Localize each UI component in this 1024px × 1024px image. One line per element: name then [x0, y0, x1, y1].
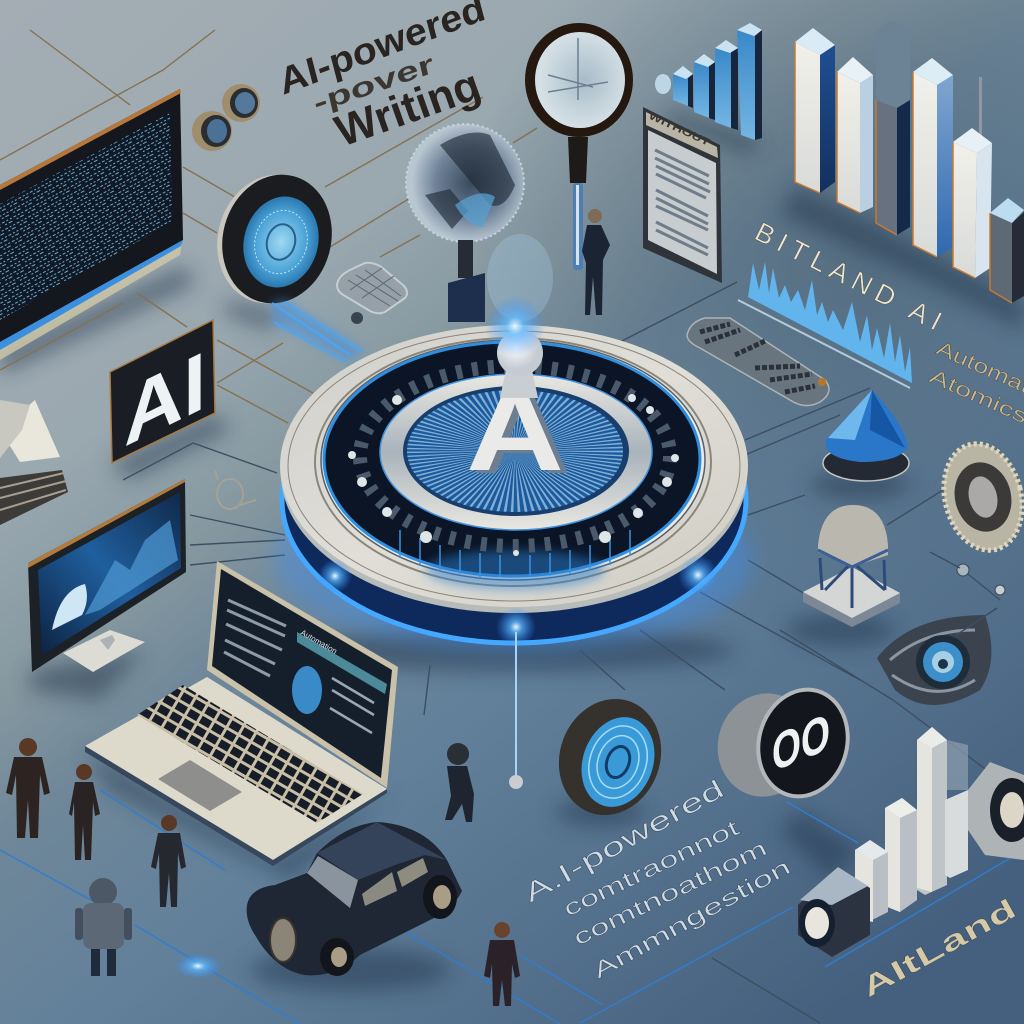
icon: magnifying glass: [525, 23, 633, 270]
platform outer glow: [274, 470, 754, 650]
person 1: [6, 738, 50, 838]
laptop: Automation: [299, 628, 339, 656]
platform base: [282, 357, 746, 643]
person 2: [69, 764, 100, 860]
icon: circuit board: [687, 318, 829, 406]
silver lip: [281, 335, 747, 613]
icon: large blue lens: [203, 162, 346, 316]
heading: Bitland AI: [750, 217, 1024, 428]
icon: blue spiral disc: [543, 684, 677, 830]
person: bottom figure: [484, 922, 520, 1006]
monitor: top left code display: [0, 89, 183, 360]
icon: glass globe: [406, 124, 553, 322]
person: kneeling figure: [445, 743, 474, 822]
laptop: [85, 561, 398, 866]
icon: speaker boxes: [798, 762, 1024, 957]
person: standing figure by magnifier: [582, 209, 610, 315]
people: group bottom left: [6, 738, 186, 907]
vintage car: [247, 822, 462, 976]
heading: AI-powered communication: [518, 773, 795, 983]
document page: WITHOUT: [647, 111, 711, 149]
bar chart: bottom right: [855, 727, 968, 922]
title: AI-powered writing: -pover: [310, 47, 437, 119]
laptop screen: [207, 561, 398, 788]
heading: Bitland AI: Automat: [933, 337, 1024, 398]
small connector bead: [930, 552, 1005, 636]
glow spot: floor: [174, 953, 222, 979]
heading: Aitland: AItLand: [856, 893, 1021, 1003]
icon: cylinder badge OO: [706, 677, 862, 809]
heading: Bitland AI: Atomics: [926, 365, 1024, 428]
icon: small eyeglass sketch: [215, 470, 256, 509]
icon: blue gem: [823, 390, 909, 481]
laptop base: [85, 677, 387, 860]
icon: envelope: [0, 400, 68, 525]
monitor: chart display: [28, 479, 186, 672]
icon: dome device: [803, 505, 900, 627]
heading: AI-powered communication: Ammngestion: [588, 854, 795, 983]
icon: speaker dial: [933, 435, 1024, 559]
title: AI-powered writing: [274, 0, 489, 156]
icon: small lenses: [192, 84, 260, 151]
document page: [643, 107, 722, 283]
ball on top of A: [497, 330, 543, 376]
letter A: A: [466, 368, 564, 495]
machinery detail: [348, 366, 679, 590]
heading: AI-powered communication: A.I-powered: [518, 773, 729, 908]
icon: cylinder badge OO: OO: [772, 702, 830, 784]
person 3: [151, 815, 186, 907]
vertical light line with bead: [509, 632, 523, 789]
icon: AI badge: AI: [124, 333, 206, 465]
icon: robot figure: [75, 878, 132, 976]
heading: AI-powered communication: comtraonnot: [559, 815, 743, 921]
sunburst disc: [407, 390, 623, 512]
title: AI-powered writing: Writing: [329, 60, 487, 156]
central AI ring platform: [274, 296, 754, 650]
chart: blue spike waveform: [738, 262, 912, 388]
stem below ball: [500, 370, 538, 398]
icon: wire mesh pad: [337, 263, 407, 324]
bar chart: tall 3D bars top right: [795, 20, 1024, 303]
outer silver ring: [280, 325, 748, 607]
small bar chart: top blue bars: [655, 23, 762, 140]
glow nodes: [485, 296, 545, 356]
inner silver ring: [380, 374, 652, 530]
laptop keyboard: [137, 685, 363, 823]
icon: eye: [877, 615, 991, 705]
dark machinery well: [324, 342, 700, 576]
laptop trackpad: [158, 760, 242, 811]
blue light beam from lens: [272, 300, 363, 362]
letter A side shading: A: [473, 371, 571, 498]
heading: AI-powered communication: comtnoathom: [569, 835, 771, 950]
heading: Bitland AI: BITLAND AI: [750, 217, 947, 336]
